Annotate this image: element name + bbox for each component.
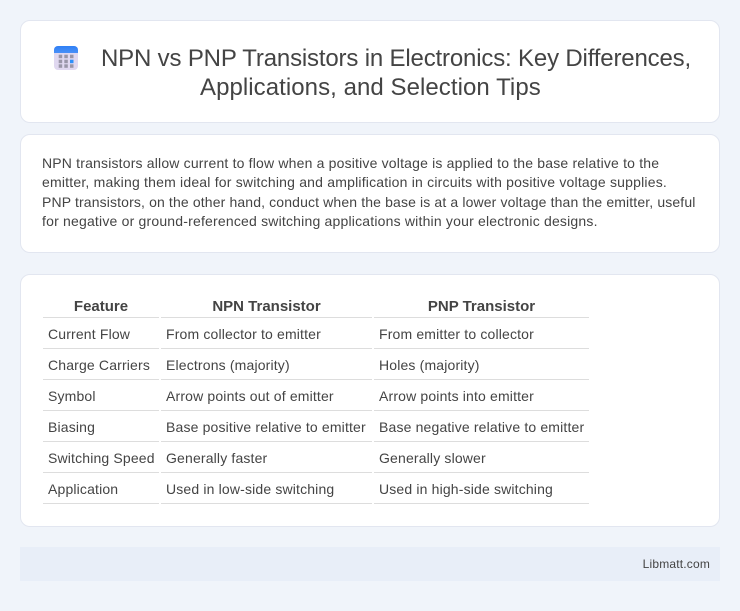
row: switching speed: Generally slower [379,450,486,466]
summary text: NPN transistors allow current to flow when a positive voltage is applied to the base relative to the [42,155,659,171]
row: switching speed: Generally faster [166,450,267,466]
table header: PNP Transistor [428,298,535,315]
row: biasing: Biasing [48,419,95,435]
row: charge carriers: Charge Carriers [48,357,150,373]
row: charge carriers [48,357,480,373]
row: current flow [48,326,534,342]
row: application: Used in high-side switching [379,481,553,497]
row: switching speed: Switching Speed [48,450,155,466]
table header: NPN Transistor [212,298,321,315]
row: biasing [48,419,584,435]
row: current flow: Current Flow [48,326,130,342]
row: application [48,481,553,497]
row: charge carriers: Electrons (majority) [166,357,290,373]
summary text [42,155,696,229]
icon: calendar [54,46,78,70]
footer bar [20,547,720,581]
row: symbol [48,388,534,404]
row: symbol: Arrow points into emitter [379,388,534,404]
row: symbol: Arrow points out of emitter [166,388,334,404]
table header: Feature [74,298,128,315]
title: Applications, and Selection Tips [200,74,541,101]
panel: summary [20,134,720,253]
footer credit: Libmatt.com [643,557,710,571]
row: current flow: From emitter to collector [379,326,534,342]
row: symbol: Symbol [48,388,96,404]
row: switching speed [48,450,486,466]
table header [74,298,535,315]
title [101,45,691,101]
summary text: for negative or ground-referenced switching applications within your electronic designs. [42,213,598,229]
row: application: Used in low-side switching [166,481,334,497]
summary text: emitter, making them ideal for switching and amplification in circuits with positive voltage supplies. [42,174,667,190]
row: current flow: From collector to emitter [166,326,321,342]
row: charge carriers: Holes (majority) [379,357,480,373]
panel: comparison table [20,274,720,527]
row: biasing: Base positive relative to emitter [166,419,366,435]
summary text: PNP transistors, on the other hand, conduct when the base is at a lower voltage than the emitter, useful [42,194,696,210]
row: biasing: Base negative relative to emitter [379,419,584,435]
title: NPN vs PNP Transistors in Electronics: Key Differences, [101,45,691,72]
row: application: Application [48,481,118,497]
panel: header [20,20,720,123]
